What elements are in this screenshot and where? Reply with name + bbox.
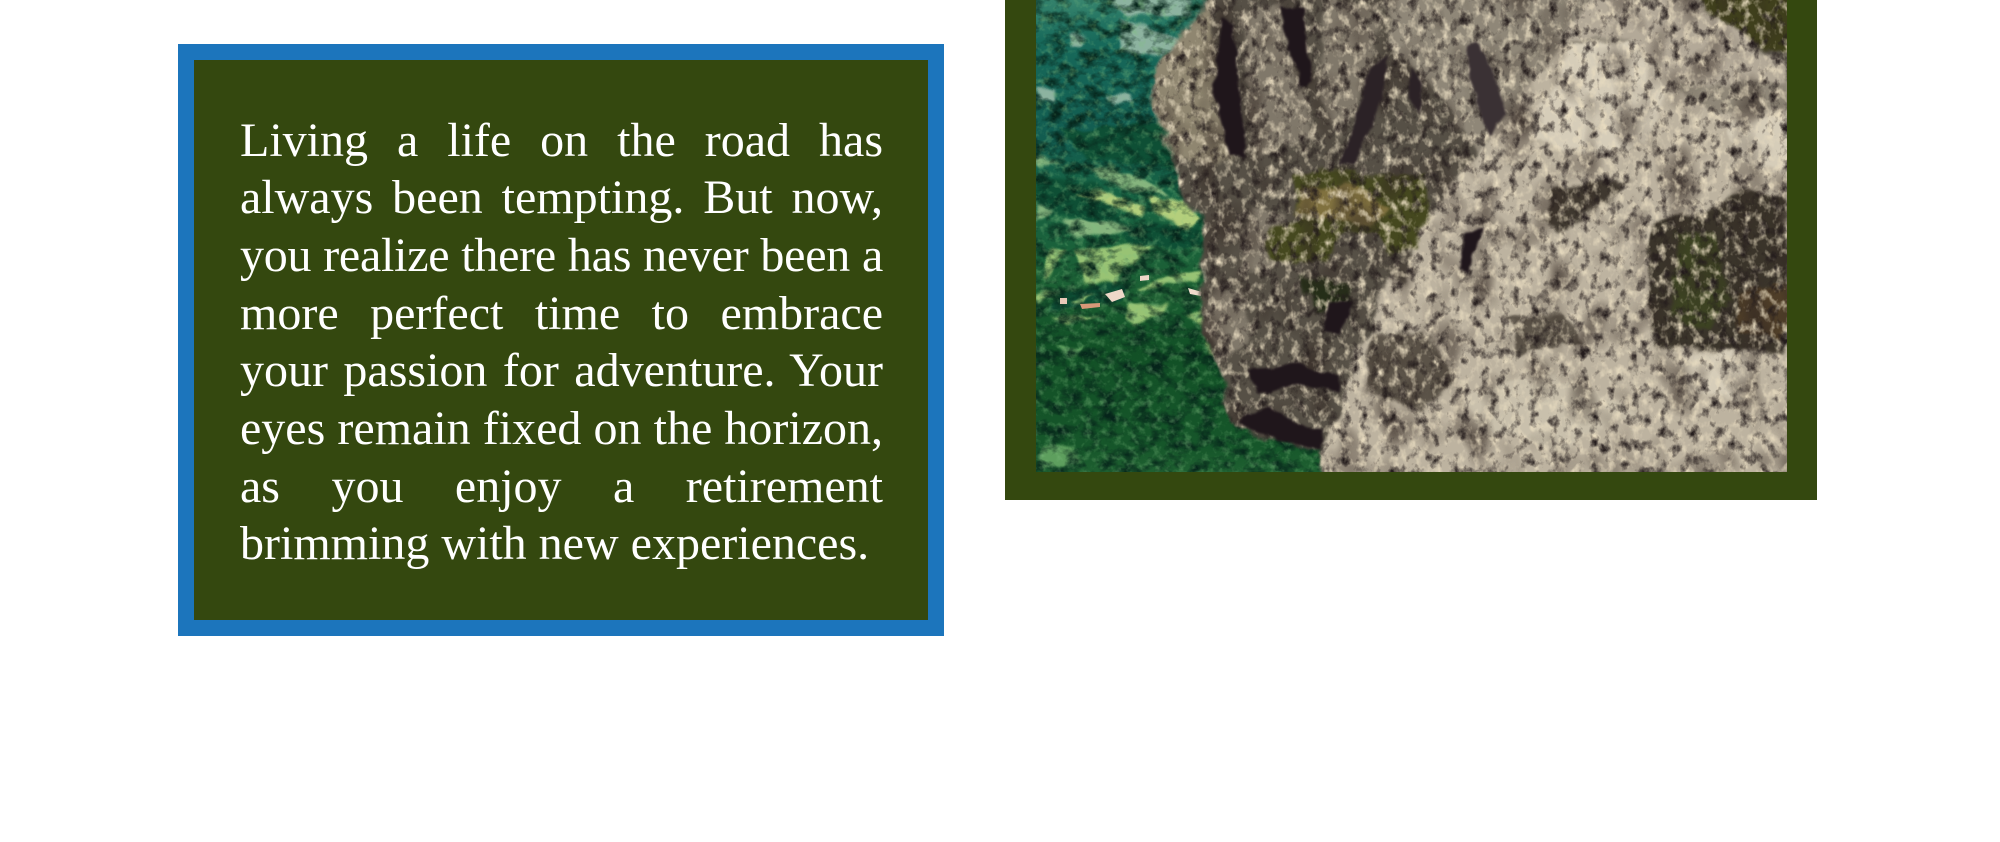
teal sliver between peaks [1225,0,1235,15]
upper mid rock [1381,0,1805,167]
dark cracks and cavities [1214,7,1508,452]
right grass [1672,233,1731,330]
vineyard [1127,283,1197,303]
shaded rock blotches [1365,180,1630,410]
rear rock lighter facets [1206,0,1381,363]
paragraph text: brimming with new experiences. [240,517,869,570]
paragraph text: your passion for adventure. Your [240,344,883,397]
paragraph text: as you enjoy a retirement [240,460,883,513]
paragraph text: eyes remain fixed on the horizon, [240,402,883,455]
top right grass [1694,0,1805,57]
bright highlights [1466,42,1787,447]
lighter left lobe [1152,0,1233,163]
paragraph text [240,114,883,570]
rock cliff [1152,0,1805,480]
dark forest bands [1036,120,1200,315]
paragraph text: you realize there has never been a [240,229,883,282]
rear rock mass [1152,0,1805,480]
paragraph text: Living a life on the road has [240,114,883,167]
front light rock [1323,40,1805,480]
panel: framed mountain photo [1005,0,1817,500]
paragraph text: always been tempting. But now, [240,171,883,224]
right dark recess [1646,187,1787,353]
central grass tuft [1270,167,1429,267]
pale upper patches [1036,0,1195,106]
green fields [1036,160,1172,238]
panel: text box with blue border [178,44,944,636]
houses [1060,275,1202,309]
paragraph text: more perfect time to embrace [240,287,883,340]
valley background [1000,0,1820,500]
illustration: rocky cliff above green valley [1036,0,1787,472]
